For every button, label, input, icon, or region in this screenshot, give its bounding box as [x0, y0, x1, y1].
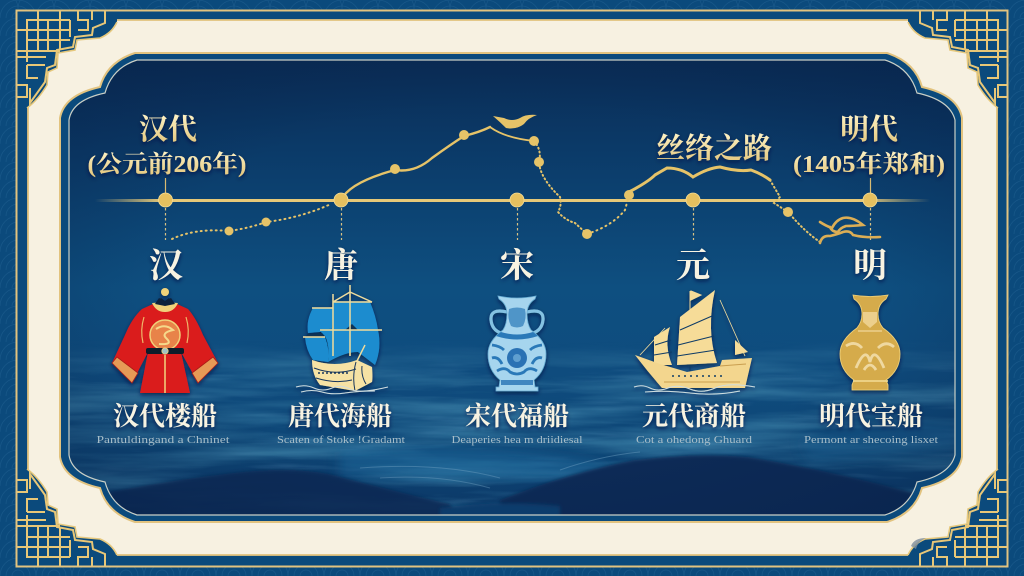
label: Tang: Scaten of Stoke !Gradamt — [277, 435, 405, 446]
dynasty characters: 唐 — [324, 246, 358, 285]
label: Song: 宋代福船 — [465, 402, 569, 431]
label: Song: Deaperies hea m driidiesal — [452, 435, 583, 446]
label: Yuan — [636, 402, 753, 446]
label: Han: 汉代楼船 — [113, 401, 217, 431]
label: Han — [96, 401, 230, 446]
heading: Ming era: 明代 — [840, 113, 898, 146]
icon: gold vase — [840, 295, 900, 390]
heading: Han era: (公元前206年) — [88, 150, 246, 178]
heading: Ming era — [793, 113, 945, 178]
label: Ming: 明代宝船 — [819, 402, 923, 431]
label: Ming — [804, 402, 938, 446]
route: silk road path — [172, 127, 820, 242]
label: Ming: Permont ar shecoing lisxet — [804, 435, 938, 446]
icon: gold bird — [493, 115, 537, 128]
label: Song — [452, 402, 583, 446]
timeline axis — [95, 178, 930, 240]
heading: Han era: 汉代 — [139, 113, 197, 146]
dynasty characters: 汉 — [149, 247, 183, 285]
heading: Ming era: (1405年郑和) — [793, 150, 945, 178]
label: Yuan: 元代商船 — [642, 402, 746, 431]
heading: silk road: 丝络之路 — [656, 132, 772, 165]
label: Han: Pantuldingand a Chninet — [96, 435, 230, 446]
icon: red robe — [112, 288, 218, 393]
panel: ocean background — [59, 52, 963, 523]
label: Tang — [277, 402, 405, 446]
dynasty characters: 宋 — [500, 248, 534, 285]
label: Yuan: Cot a ohedong Ghuard — [636, 435, 753, 446]
route stop markers — [224, 130, 793, 239]
dynasty characters: 明 — [853, 248, 887, 285]
heading: Han era — [88, 113, 246, 178]
icon: gold cloud — [820, 218, 880, 243]
icon: Tang ship — [296, 285, 388, 394]
icon: blue porcelain vase — [488, 296, 546, 391]
dynasty characters: 元 — [676, 248, 710, 285]
timeline nodes — [158, 193, 877, 207]
label: Tang: 唐代海船 — [288, 402, 392, 431]
icon: Yuan junk — [634, 290, 755, 394]
wave shapes — [111, 428, 952, 514]
dynasty characters — [149, 246, 887, 285]
